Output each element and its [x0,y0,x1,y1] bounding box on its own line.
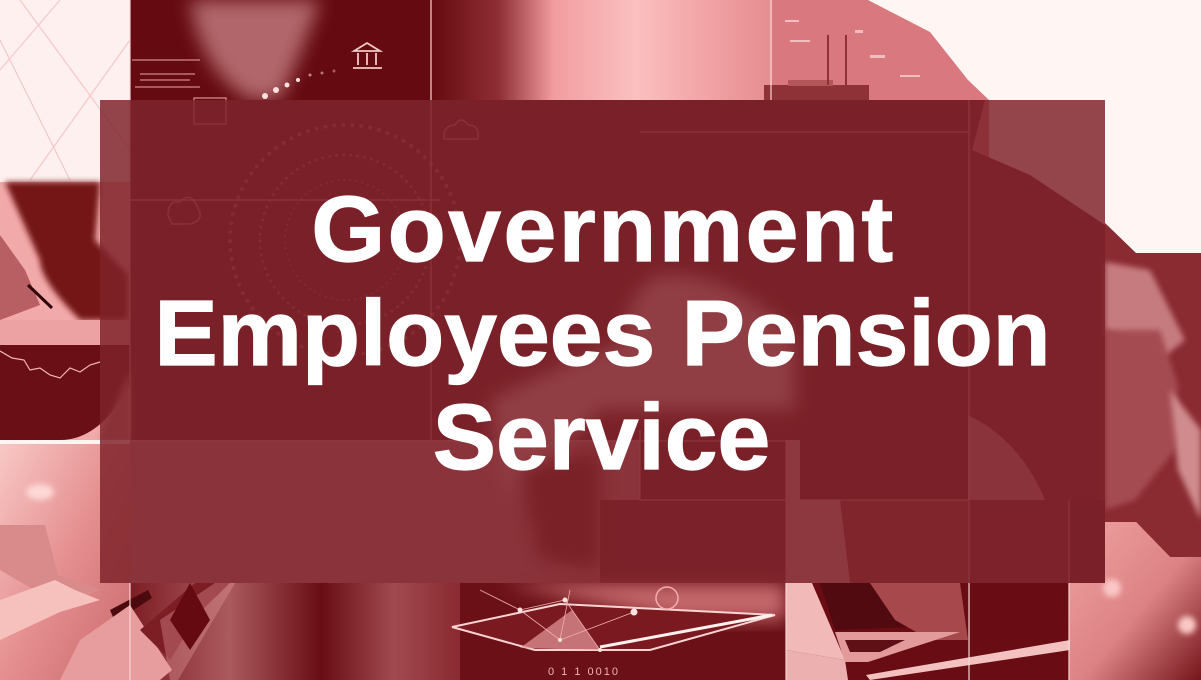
icon: bank [353,43,382,68]
bottom right pink tile [1069,522,1201,680]
bottom band left [60,583,460,680]
grid lines [130,0,1069,680]
right hand tile [1105,223,1201,557]
upper panel underlay [130,100,790,440]
top left tile [0,0,130,182]
title: Employees Pension [154,281,1051,385]
skyline tile [764,0,989,225]
bottom band laptop [786,583,1070,680]
title panel [100,100,1105,583]
lower left hands tile [0,440,130,680]
panel icons [168,98,478,224]
dotted radar arcs [230,125,460,355]
left suit tile [0,182,130,440]
title: Service [433,385,770,489]
lower middle panel underlay [130,440,790,583]
bottom band tablet [452,583,786,680]
binary text: 0 1 1 0010 [548,666,620,678]
title: Government [311,177,896,281]
top dark tile with bank icon [130,0,431,100]
light swath under title [490,275,795,500]
top middle glow tile [431,0,772,100]
